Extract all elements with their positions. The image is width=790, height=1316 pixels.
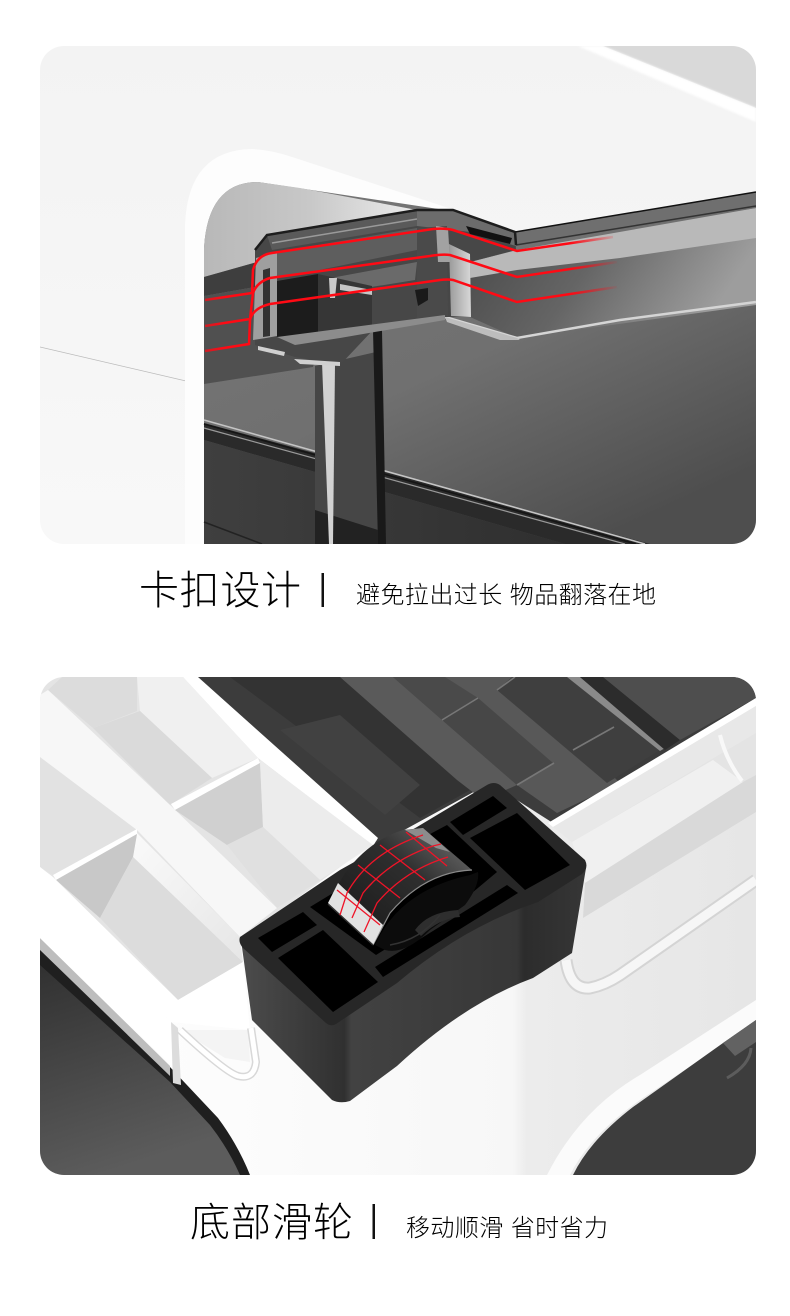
pillar left bbox=[417, 226, 448, 318]
panel: snap clip photo bbox=[40, 46, 756, 544]
clip top strip bbox=[267, 210, 417, 250]
left recess shade bbox=[180, 1030, 250, 1062]
compartment A right wall bbox=[137, 677, 258, 778]
dark band one bbox=[340, 677, 517, 800]
left white lower band bbox=[40, 915, 172, 1066]
compartment A floor bbox=[93, 711, 212, 805]
compartment C floor bbox=[100, 857, 243, 1000]
right tray curved rib bbox=[720, 735, 742, 781]
dark left strip bbox=[230, 677, 470, 818]
caption: bottom casters bbox=[190, 1201, 608, 1245]
rim dark lower edge bbox=[516, 206, 756, 245]
tape tip edge bbox=[328, 904, 373, 945]
heading: 卡扣设计 bbox=[139, 569, 301, 613]
heading: 底部滑轮 bbox=[190, 1201, 353, 1245]
lower white edge of right panel bbox=[445, 302, 756, 338]
right rim strip bbox=[748, 208, 756, 210]
clip lighter underside bbox=[277, 228, 417, 278]
right interior panel bbox=[470, 238, 756, 336]
red line bottom bbox=[205, 280, 617, 351]
tape rim bbox=[373, 870, 472, 945]
white lid edge highlight bbox=[578, 46, 756, 122]
left tube shadow bbox=[180, 1028, 256, 1077]
hub highlight ring bbox=[415, 910, 460, 936]
hole one bbox=[258, 912, 317, 952]
light inner arch bbox=[204, 182, 417, 277]
divider B bbox=[171, 758, 260, 810]
clip inner dark wall bbox=[318, 274, 372, 337]
pillar top glint bbox=[436, 226, 450, 262]
left clip column bbox=[253, 252, 277, 340]
compartment C left wall bbox=[56, 834, 137, 918]
post dark foot bbox=[315, 510, 378, 544]
clip bottom ledge bbox=[445, 317, 520, 340]
wheel hub bbox=[375, 872, 478, 951]
dark compartment one bbox=[442, 698, 553, 785]
right tray pale floor bbox=[572, 760, 743, 883]
shelf highlight line bbox=[204, 420, 645, 544]
shelf second highlight bbox=[204, 428, 625, 544]
dark far right region bbox=[603, 677, 756, 740]
hole four bbox=[470, 813, 570, 890]
white lid surface bbox=[40, 46, 756, 442]
smoked window bbox=[204, 182, 756, 544]
tape roll bbox=[328, 828, 472, 945]
clip top dark edge bbox=[255, 210, 516, 250]
panel: caster photo bbox=[40, 677, 756, 1175]
cross lines bbox=[337, 890, 380, 925]
red grid bbox=[337, 832, 448, 932]
dark left floor bbox=[280, 715, 420, 815]
dark drawer top bbox=[197, 677, 756, 846]
recess edge bbox=[171, 1022, 181, 1085]
white arch frame bbox=[185, 149, 448, 382]
clip lower shelf bbox=[277, 315, 445, 345]
lower right small tick bbox=[727, 1048, 751, 1078]
clip tick small bbox=[340, 284, 372, 295]
hub highlight arc bbox=[390, 915, 440, 945]
red line top bbox=[205, 229, 613, 300]
clip bright foot two bbox=[294, 359, 340, 366]
block top bbox=[239, 783, 586, 1025]
compartment B floor bbox=[227, 827, 320, 908]
compartment B right wall bbox=[260, 760, 373, 880]
right white rim bbox=[548, 698, 756, 827]
seam line bbox=[40, 347, 186, 381]
post white wedge bbox=[322, 362, 335, 544]
hole center long bbox=[310, 825, 497, 955]
lower right white curve bbox=[547, 1000, 756, 1175]
dark divider four bbox=[497, 677, 515, 690]
dark strip bbox=[580, 677, 680, 750]
caption: snap design bbox=[139, 569, 656, 613]
right tray recess bbox=[572, 733, 756, 883]
vertical post bbox=[315, 352, 378, 530]
hole slot bbox=[375, 885, 518, 977]
description: 移动顺滑 省时省力 bbox=[406, 1215, 608, 1242]
lower right lighter band bbox=[723, 1020, 756, 1056]
small black tab bbox=[415, 288, 428, 306]
clip window light bbox=[334, 262, 417, 287]
right tray wall bbox=[553, 706, 756, 842]
left rim of window bbox=[204, 262, 257, 296]
divider bar bbox=[372, 1204, 375, 1239]
lower right dark window bbox=[573, 1020, 756, 1175]
right interior light band bbox=[470, 208, 756, 278]
left tube highlight bbox=[180, 1028, 256, 1077]
clip bright foot bbox=[258, 346, 285, 356]
caster block bbox=[239, 783, 586, 1102]
compartment C upper wall bbox=[133, 833, 243, 962]
clip top right strip bbox=[417, 210, 516, 246]
tape light tip bbox=[328, 883, 383, 945]
bright pillar bbox=[449, 244, 471, 317]
clip body bbox=[255, 226, 516, 362]
left dark panel bbox=[204, 287, 320, 384]
red line middle bbox=[205, 255, 617, 326]
lower thin line bbox=[204, 522, 262, 544]
arc lines bbox=[340, 835, 423, 915]
divider bar bbox=[322, 573, 324, 607]
white body bbox=[40, 677, 756, 1175]
dark divider one bbox=[442, 698, 478, 720]
tape gloss bbox=[405, 828, 450, 852]
lower left dark window bbox=[40, 950, 248, 1175]
hole three bbox=[450, 796, 507, 835]
dark compartment upper bbox=[393, 677, 478, 720]
divider C bbox=[53, 829, 137, 880]
shelf dark line bbox=[204, 424, 636, 544]
description: 避免拉出过长 物品翻落在地 bbox=[356, 582, 656, 609]
compartment B back wall bbox=[175, 763, 263, 845]
clip tick bbox=[329, 278, 337, 298]
dark divider three bbox=[573, 727, 614, 750]
compartment A back wall bbox=[48, 677, 137, 728]
clip top strip highlight bbox=[272, 219, 417, 243]
dark compartment two bbox=[497, 677, 660, 783]
left tray base bbox=[40, 677, 377, 1000]
lower dark panel bbox=[204, 440, 565, 544]
dark divider two bbox=[517, 763, 554, 785]
clip black opening bbox=[277, 274, 318, 337]
block side bbox=[241, 868, 586, 1102]
grey strip bbox=[40, 938, 170, 1076]
dark band two bbox=[393, 677, 620, 813]
hole two bbox=[278, 930, 378, 1012]
rim black edge bbox=[515, 192, 756, 232]
right tube bbox=[566, 880, 756, 988]
left small compartment bbox=[40, 757, 137, 875]
right tray shadow band bbox=[583, 775, 756, 918]
clip black edge bbox=[466, 226, 512, 244]
grey corner beyond lid bbox=[603, 46, 756, 108]
left white rim band bbox=[183, 677, 378, 846]
light strip bbox=[567, 677, 665, 751]
left white front rim bbox=[40, 867, 250, 1030]
center white bar bbox=[40, 690, 277, 937]
right tube shadow bbox=[566, 880, 756, 988]
left column dark bbox=[263, 268, 270, 337]
dark gasket band bbox=[40, 947, 250, 1175]
post black edge bbox=[373, 330, 386, 544]
